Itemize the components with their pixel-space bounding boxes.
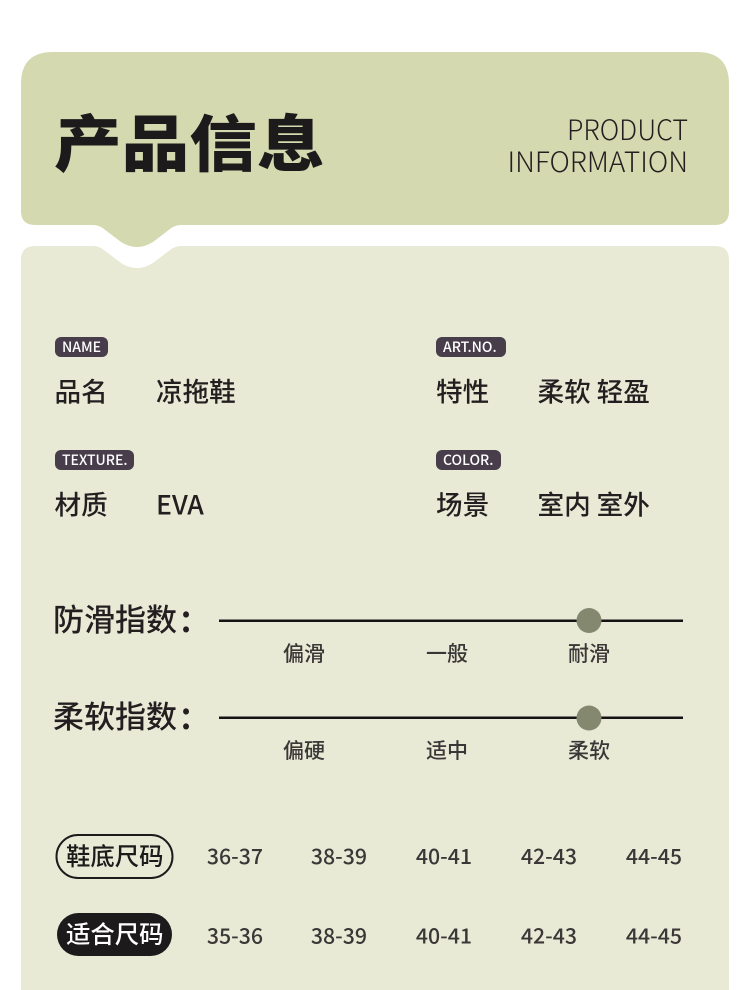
subtitle: INFORMATION xyxy=(507,141,688,181)
field: color: 室内 室外 xyxy=(538,484,650,522)
field: texture: TEXTURE. xyxy=(62,450,128,470)
subtitle: PRODUCT xyxy=(567,109,688,149)
panel: lower body xyxy=(21,246,729,990)
subtitle xyxy=(507,109,688,181)
size row: fitting size: 44-45 xyxy=(626,920,682,950)
slider: softness index: 适中 xyxy=(426,735,468,765)
slider: softness index: 柔软 xyxy=(568,735,610,765)
field: texture: 材质 xyxy=(54,484,108,522)
slider: anti-slip index: : xyxy=(180,588,192,643)
slider: softness index: 偏硬 xyxy=(283,735,325,765)
size row: fitting size: 40-41 xyxy=(416,920,472,950)
size row: fitting size xyxy=(57,913,682,956)
field: color: COLOR. xyxy=(443,450,493,470)
field: art no: 特性 xyxy=(436,370,489,410)
size row: sole size: 鞋底尺码 xyxy=(66,838,164,873)
field: art no: ART.NO. xyxy=(443,337,497,357)
size row: fitting size: 适合尺码 xyxy=(66,916,164,951)
field: texture: EVA xyxy=(156,484,204,522)
field: name xyxy=(54,337,236,410)
size row: sole size: 38-39 xyxy=(311,840,367,871)
field: color: 场景 xyxy=(436,484,489,522)
size row: sole size xyxy=(56,835,682,878)
field: name: 凉拖鞋 xyxy=(156,370,236,410)
slider: anti-slip index: 耐滑 xyxy=(568,638,610,668)
field: texture xyxy=(54,450,204,522)
slider: softness index: : xyxy=(180,685,192,740)
size row: fitting size: 38-39 xyxy=(311,920,367,950)
slider: anti-slip index: 防滑指数 xyxy=(53,595,177,640)
slider: anti-slip index xyxy=(53,588,683,668)
field: name: 品名 xyxy=(54,370,108,410)
panel: header with pointer xyxy=(21,52,729,247)
slider: softness index xyxy=(53,685,683,765)
field: art no xyxy=(436,337,650,410)
size row: sole size: 40-41 xyxy=(416,840,472,871)
size row: sole size: 44-45 xyxy=(626,840,682,871)
field: name: NAME xyxy=(62,337,101,357)
size row: sole size: 36-37 xyxy=(207,840,263,871)
slider: softness index: 柔软指数 xyxy=(53,692,177,737)
size row: fitting size: 42-43 xyxy=(521,920,577,950)
field: art no: 柔软 轻盈 xyxy=(538,370,650,410)
field: color xyxy=(436,450,650,522)
slider: anti-slip index: 偏滑 xyxy=(283,638,325,668)
size row: sole size: 42-43 xyxy=(521,840,577,871)
slider: anti-slip index: 一般 xyxy=(426,638,468,668)
title: 产品信息 xyxy=(54,95,325,184)
size row: fitting size: 35-36 xyxy=(207,920,263,950)
